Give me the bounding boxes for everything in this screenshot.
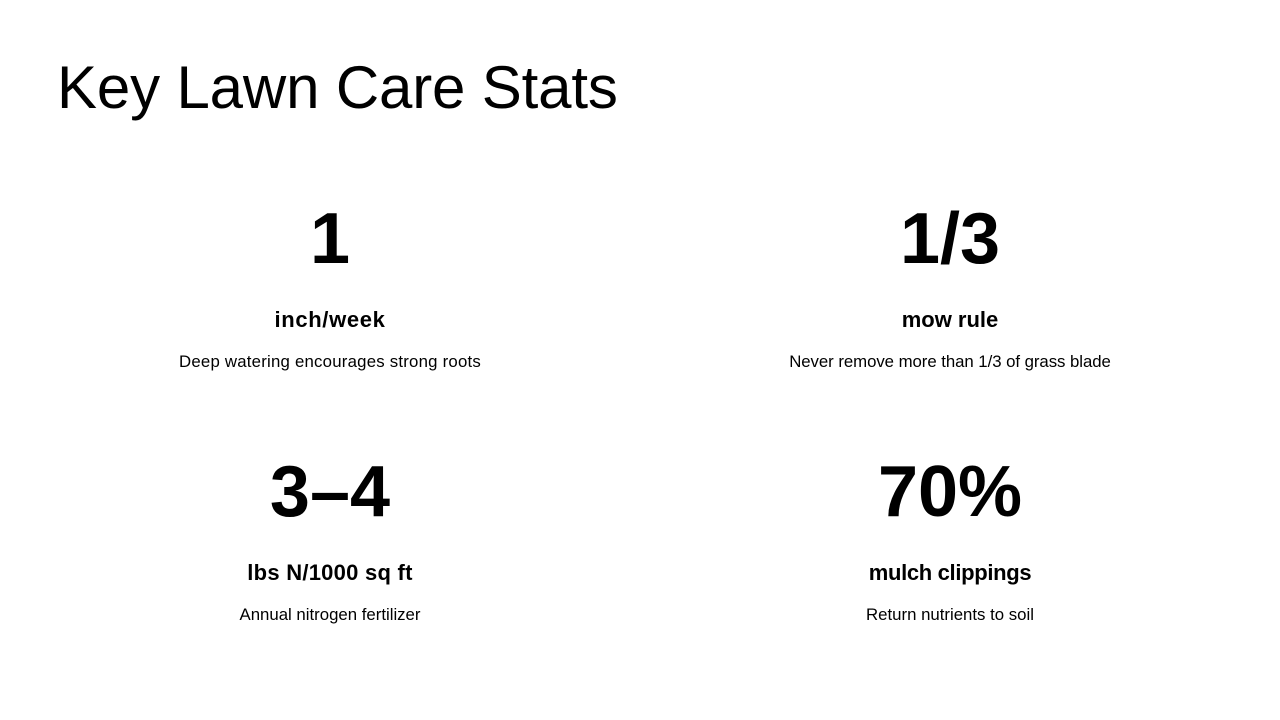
- stat card: 70% mulch clippings: [866, 452, 1034, 624]
- stat card: 3-4 lbs N: [240, 452, 420, 624]
- stat label: mulch clippings: [869, 560, 1031, 585]
- stat number: 1: [310, 199, 350, 279]
- stat card: 1 inch/week: [179, 199, 481, 371]
- stat label: mow rule: [902, 307, 998, 332]
- stat description: Deep watering encourages strong roots: [179, 352, 481, 371]
- stat description: Return nutrients to soil: [866, 605, 1034, 624]
- stat number: 3–4: [270, 452, 390, 532]
- stat number: 70%: [878, 452, 1022, 532]
- stat description: Never remove more than 1/3 of grass blade: [789, 352, 1111, 371]
- stat card: 1/3 mow rule: [789, 199, 1111, 371]
- stat description: Annual nitrogen fertilizer: [240, 605, 420, 624]
- stat label: inch/week: [274, 307, 386, 332]
- stat label: lbs N/1000 sq ft: [247, 560, 413, 585]
- stat number: 1/3: [900, 199, 1000, 279]
- title: Key Lawn Care Stats: [57, 54, 618, 121]
